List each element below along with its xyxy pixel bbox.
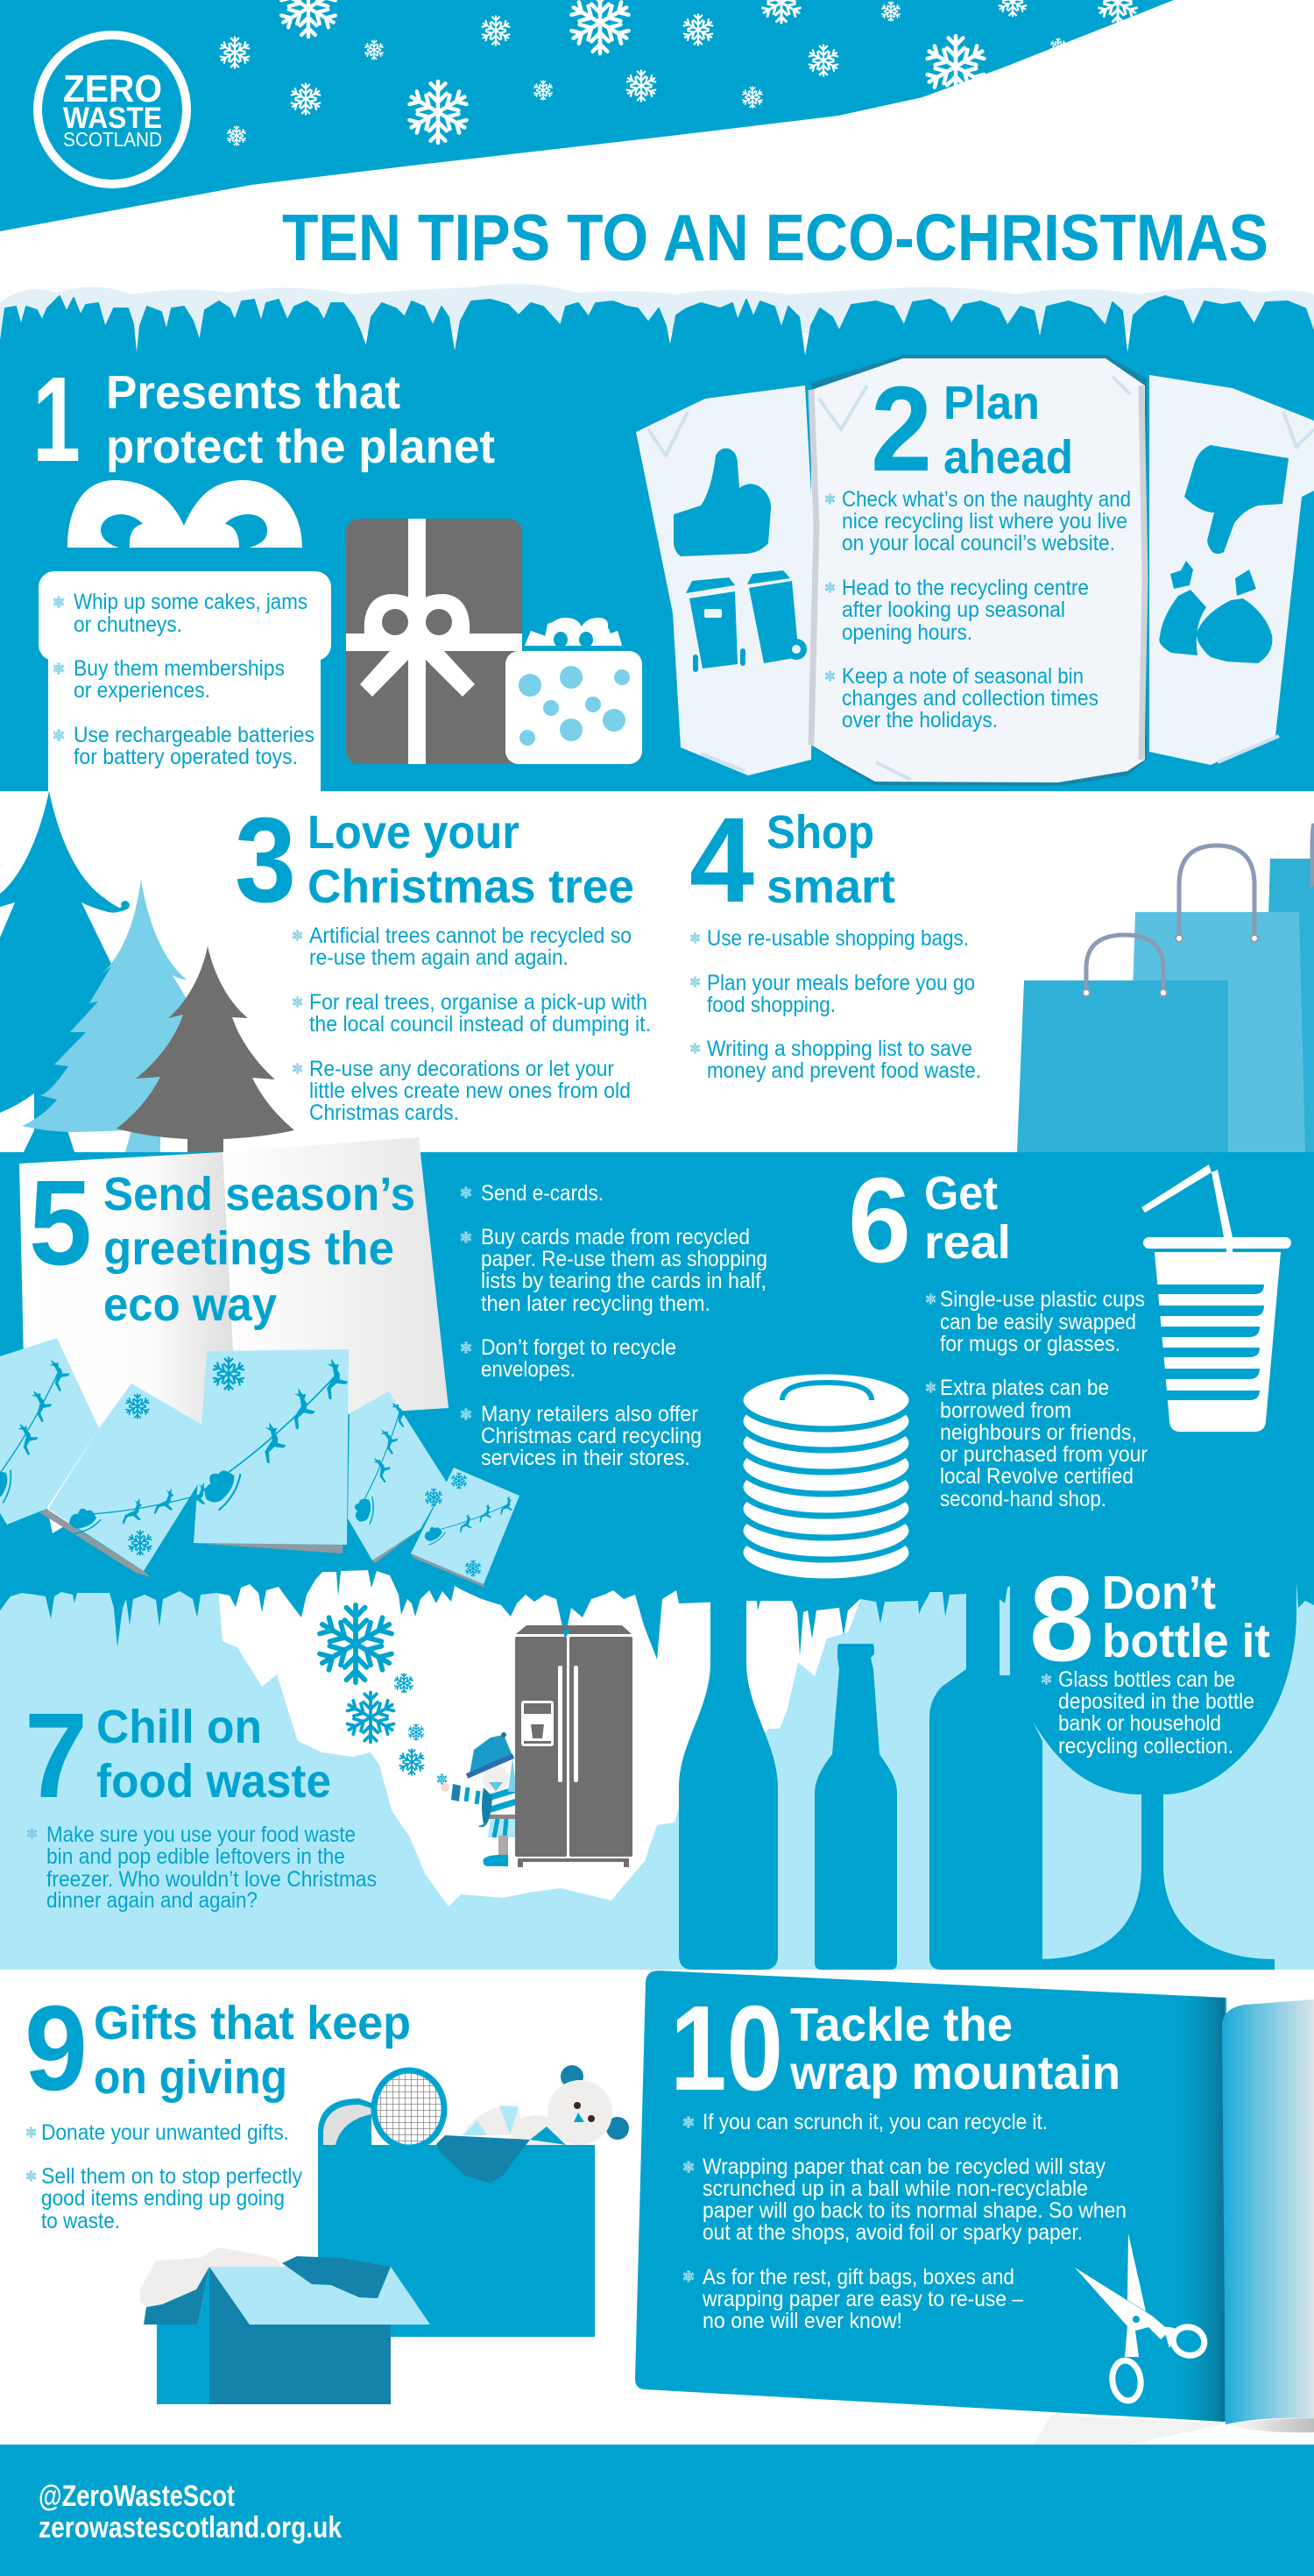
text: tip 4 bullets: Plan your meals before you go xyxy=(707,971,975,995)
number 3: 3 xyxy=(235,793,296,928)
text: tip 9 bullets: Donate your unwanted gifts. xyxy=(41,2120,289,2145)
icon: thumb down xyxy=(1184,445,1289,554)
text: tip 8 bullet: recycling collection. xyxy=(1058,1734,1233,1759)
text: tip 2 bullets: Check what’s on the naughty and xyxy=(842,487,1131,512)
text: tip 5 bullets: services in their stores. xyxy=(481,1446,690,1470)
icon: grey gift xyxy=(346,519,522,764)
text: tip 3 bullets: Artificial trees cannot be recycled so xyxy=(309,924,632,948)
text: tip 3 bullets xyxy=(292,924,651,1125)
text: tip 9 bullets: Sell them on to stop perfectly xyxy=(41,2164,302,2189)
text: tip 3 bullets: For real trees, organise a pick-up with xyxy=(309,990,647,1015)
heading: chill on food waste xyxy=(96,1701,331,1808)
heading: love your Christmas tree xyxy=(307,806,634,913)
footer contact text xyxy=(39,2480,342,2544)
text: tip 10 bullets xyxy=(683,2110,1127,2333)
heading: shop smart: smart xyxy=(766,860,895,913)
text: tip 5 bullets: Many retailers also offer xyxy=(481,1402,698,1426)
text: tip 8 bullet xyxy=(1041,1667,1254,1759)
text: tip 7 bullet xyxy=(26,1822,377,1913)
logo: Zero Waste Scotland: SCOTLAND xyxy=(63,128,162,151)
illustration: shopping bags xyxy=(1017,824,1314,1152)
text: tip 1 bullets: Whip up some cakes, jams xyxy=(74,590,307,614)
text: tip 6 bullets: can be easily swapped xyxy=(940,1310,1136,1334)
text: tip 5 bullets: lists by tearing the cards in half, xyxy=(481,1269,766,1293)
text: tip 6 bullets: for mugs or glasses. xyxy=(940,1332,1120,1356)
text: tip 5 bullets: Buy cards made from recycled xyxy=(481,1225,750,1249)
text: tip 4 bullets: Writing a shopping list to save xyxy=(707,1037,972,1061)
text: tip 8 bullet: Glass bottles can be xyxy=(1058,1667,1235,1692)
heading: shop smart xyxy=(766,806,895,913)
icon: wine glass xyxy=(1010,1582,1296,1970)
text: tip 6 bullets: Single-use plastic cups xyxy=(940,1287,1145,1312)
heading: gifts that keep on giving: on giving xyxy=(94,2051,287,2104)
illustration: reindeer Christmas cards xyxy=(0,1338,519,1588)
illustration: donation boxes with toys xyxy=(140,2065,629,2404)
header banner with snowflakes xyxy=(0,0,1174,231)
text: tip 9 bullets: to waste. xyxy=(41,2209,120,2233)
text: tip 10 bullets: out at the shops, avoid foil or sparky paper. xyxy=(703,2220,1083,2245)
icon: plastic cup and straw xyxy=(1139,1164,1291,1432)
heading: tackle the wrap mountain: Tackle the xyxy=(790,1999,1013,2051)
text: tip 3 bullets: re-use them again and again. xyxy=(309,945,569,970)
text: tip 10 bullets: Wrapping paper that can be recycled will stay xyxy=(703,2155,1106,2179)
footer contact text: zerowastescotland.org.uk xyxy=(39,2511,342,2544)
icon: recycling bins xyxy=(686,570,807,672)
text: tip 2 bullets: Head to the recycling centre xyxy=(842,576,1089,600)
heading: gifts that keep on giving: Gifts that keep xyxy=(94,1997,411,2049)
heading: plan ahead: Plan xyxy=(943,377,1040,429)
text: tip 2 bullets: over the holidays. xyxy=(842,708,998,732)
text: tip 3 bullets: the local council instead of dumping it. xyxy=(309,1012,651,1037)
text: tip 2 bullets: after looking up seasonal xyxy=(842,598,1065,622)
text: tip 10 bullets: scrunched up in a ball while non-recyclable xyxy=(703,2176,1088,2201)
number 6: 6 xyxy=(848,1153,911,1288)
heading: send season's greetings the eco way: Send season’s xyxy=(103,1168,415,1221)
heading: chill on food waste: Chill on xyxy=(96,1701,262,1753)
logo: Zero Waste Scotland: ZERO xyxy=(63,67,162,110)
icon: small spotted gift xyxy=(505,618,642,764)
number 5: 5 xyxy=(29,1156,92,1291)
number 7: 7 xyxy=(25,1688,88,1823)
text: tip 7 bullet: freezer. Who wouldn’t love Christmas xyxy=(46,1867,377,1892)
text: tip 10 bullets: wrapping paper are easy to re-use – xyxy=(702,2287,1023,2311)
icon: elf xyxy=(436,1732,517,1866)
text: tip 2 bullets: changes and collection times xyxy=(842,686,1099,711)
heading: presents that protect the planet xyxy=(106,366,495,473)
text: tip 5 bullets xyxy=(461,1181,767,1470)
heading: chill on food waste: food waste xyxy=(96,1755,331,1808)
text: tip 3 bullets: Christmas cards. xyxy=(309,1100,459,1125)
text: tip 2 bullets: on your local council’s website. xyxy=(842,531,1115,556)
text: tip 10 bullets: no one will ever know! xyxy=(703,2309,902,2333)
text: tip 5 bullets: paper. Re-use them as shopping xyxy=(481,1247,767,1271)
icon: fridge xyxy=(515,1625,632,1867)
text: tip 7 bullet: dinner again and again? xyxy=(46,1888,258,1913)
text: tip 10 bullets: As for the rest, gift bags, boxes and xyxy=(703,2265,1014,2289)
number 1: 1 xyxy=(32,352,81,487)
text: tip 1 bullets: or chutneys. xyxy=(74,612,182,637)
text: tip 7 bullet: bin and pop edible leftovers in the xyxy=(46,1844,345,1869)
icon: rubbish bags xyxy=(1159,561,1272,663)
panel: tip 2 parchment scroll xyxy=(636,355,1314,786)
heading: don't bottle it: bottle it xyxy=(1102,1615,1270,1667)
icon: thumb up xyxy=(674,449,771,556)
text: tip 4 bullets xyxy=(689,926,981,1083)
text: tip 5 bullets: then later recycling them. xyxy=(481,1292,710,1316)
heading: presents that protect the planet: Presents that xyxy=(106,366,400,419)
text: tip 1 bullets: Buy them memberships xyxy=(74,656,285,681)
number 4: 4 xyxy=(689,793,754,928)
panel: tip 10 wrapping paper xyxy=(635,1971,1314,2445)
logo: Zero Waste Scotland: WASTE xyxy=(63,102,162,135)
heading: tackle the wrap mountain xyxy=(789,1999,1120,2099)
heading: love your Christmas tree: Love your xyxy=(307,806,519,859)
heading: gifts that keep on giving xyxy=(94,1997,411,2104)
icon: bottles xyxy=(679,1586,1042,1970)
text: tip 10 bullets: paper will go back to its normal shape. So when xyxy=(703,2198,1127,2223)
text: tip 3 bullets: little elves create new ones from old xyxy=(309,1079,631,1103)
heading: don't bottle it: Don’t xyxy=(1102,1567,1216,1619)
text: tip 4 bullets: money and prevent food waste. xyxy=(707,1058,981,1083)
text: tip 6 bullets: or purchased from your xyxy=(940,1442,1148,1467)
heading: get real: Get xyxy=(924,1167,998,1220)
heading: get real: real xyxy=(924,1216,1011,1269)
text: tip 2 bullets xyxy=(824,487,1131,732)
text: tip 1 bullets: for battery operated toys. xyxy=(74,745,298,769)
icon: stack of plates xyxy=(740,1371,912,1582)
heading: love your Christmas tree: Christmas tree xyxy=(307,860,634,913)
heading: get real xyxy=(924,1167,1011,1269)
illustration: Christmas trees xyxy=(0,791,294,1152)
heading: send season's greetings the eco way xyxy=(103,1168,415,1331)
text: tip 4 bullets: Use re-usable shopping bags. xyxy=(707,926,969,951)
icon: scissors xyxy=(1075,2233,1208,2403)
illustration: open white card xyxy=(19,1137,449,1533)
text: tip 6 bullets: Extra plates can be xyxy=(940,1376,1109,1400)
text: tip 1 bullets: Use rechargeable batteries xyxy=(74,723,314,747)
heading: plan ahead xyxy=(943,377,1073,484)
panel: tips 3 and 4 white band xyxy=(0,791,1314,1152)
text: tip 6 bullets: local Revolve certified xyxy=(940,1464,1134,1489)
panel: tips 5 and 6 blue band with icicles over section 7/8 xyxy=(0,1152,1314,1970)
footer band xyxy=(0,2445,1314,2576)
text: tip 1 bullets: or experiences. xyxy=(74,678,210,703)
number 8: 8 xyxy=(1029,1552,1094,1687)
logo: Zero Waste Scotland xyxy=(38,35,187,184)
number 10: 10 xyxy=(670,1981,783,2116)
heading: presents that protect the planet: protect the planet xyxy=(106,421,495,473)
text: tip 6 bullets: second-hand shop. xyxy=(940,1487,1106,1511)
text: tip 2 bullets: Keep a note of seasonal bin xyxy=(842,664,1084,689)
footer contact text: @ZeroWasteScot xyxy=(39,2480,235,2513)
text: tip 5 bullets: Christmas card recycling xyxy=(481,1424,702,1448)
text: tip 5 bullets: Don’t forget to recycle xyxy=(481,1335,676,1360)
text: tip 5 bullets: Send e-cards. xyxy=(481,1181,604,1206)
text: tip 6 bullets: borrowed from xyxy=(940,1398,1071,1423)
heading: don't bottle it xyxy=(1102,1567,1270,1667)
number 9: 9 xyxy=(25,1981,88,2116)
text: tip 9 bullets xyxy=(25,2120,302,2233)
text: tip 6 bullets: neighbours or friends, xyxy=(940,1420,1137,1445)
text: tip 7 bullet: Make sure you use your food waste xyxy=(46,1822,356,1847)
heading: shop smart: Shop xyxy=(766,806,874,859)
text: tip 2 bullets: nice recycling list where you live xyxy=(842,509,1127,534)
text: tip 8 bullet: deposited in the bottle xyxy=(1058,1689,1254,1714)
heading: tackle the wrap mountain: wrap mountain xyxy=(789,2047,1120,2099)
text: tip 8 bullet: bank or household xyxy=(1058,1711,1221,1736)
text: tip 3 bullets: Re-use any decorations or let your xyxy=(309,1057,614,1081)
icon: white present holding tip 1 text xyxy=(39,480,331,792)
text: tip 10 bullets: If you can scrunch it, you can recycle it. xyxy=(703,2110,1048,2134)
text: tip 5 bullets: envelopes. xyxy=(481,1357,576,1382)
text: tip 6 bullets xyxy=(925,1287,1148,1511)
heading: send season's greetings the eco way: greetings the xyxy=(103,1222,394,1275)
text: tip 1 bullets xyxy=(53,590,314,769)
number 2: 2 xyxy=(871,362,932,497)
text: tip 4 bullets: food shopping. xyxy=(707,993,836,1017)
illustration: snowflakes in frost xyxy=(317,1605,425,1775)
text: tip 2 bullets: opening hours. xyxy=(842,620,972,645)
panel: tips 1 and 2 background with icicles xyxy=(0,284,1314,791)
heading: send season's greetings the eco way: eco way xyxy=(103,1278,277,1331)
heading: plan ahead: ahead xyxy=(943,431,1073,484)
text: tip 9 bullets: good items ending up going xyxy=(41,2186,285,2211)
